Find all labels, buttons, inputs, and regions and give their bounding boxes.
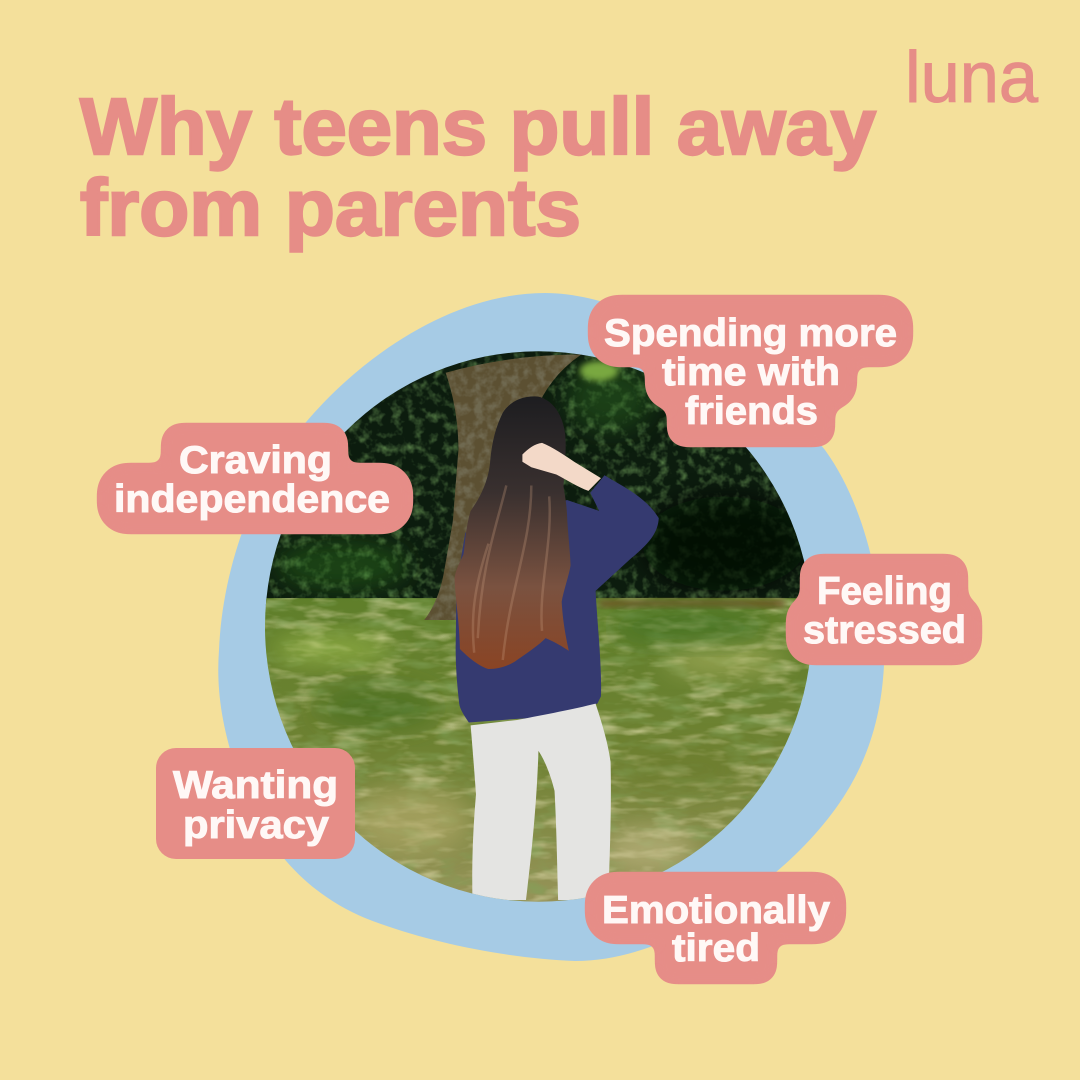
photo background: hedge bbox=[260, 340, 831, 605]
hair bbox=[455, 396, 571, 669]
title: from parents bbox=[80, 163, 581, 252]
label: wanting privacy: Wanting bbox=[173, 764, 338, 807]
label: spending more time with friends: friends bbox=[685, 390, 818, 433]
title bbox=[80, 82, 877, 252]
label: craving independence: independence bbox=[114, 478, 390, 521]
photo background: grass bbox=[260, 598, 831, 907]
sweatshirt bbox=[456, 475, 659, 723]
label: feeling stressed: stressed bbox=[803, 609, 966, 652]
blue blob frame bbox=[218, 293, 884, 961]
label: spending more time with friends: Spending more bbox=[604, 312, 897, 355]
hand and forearm bbox=[522, 443, 601, 491]
photo: girl seen from behind in a park bbox=[260, 340, 831, 907]
trousers bbox=[471, 704, 611, 900]
label: emotionally tired: Emotionally bbox=[602, 889, 830, 932]
logo: luna: luna bbox=[905, 38, 1039, 118]
label: craving independence: Craving bbox=[179, 439, 332, 482]
label: spending more time with friends bbox=[588, 295, 913, 447]
label: feeling stressed bbox=[786, 554, 982, 665]
label: emotionally tired: tired bbox=[672, 927, 760, 970]
title: Why teens pull away bbox=[80, 82, 877, 171]
label: emotionally tired bbox=[585, 872, 846, 984]
label: wanting privacy bbox=[156, 748, 355, 859]
label: wanting privacy: privacy bbox=[183, 804, 329, 847]
label: craving independence bbox=[97, 423, 413, 534]
tree trunk bbox=[424, 354, 581, 620]
label: spending more time with friends: time with bbox=[662, 351, 840, 394]
label: feeling stressed: Feeling bbox=[817, 570, 952, 613]
